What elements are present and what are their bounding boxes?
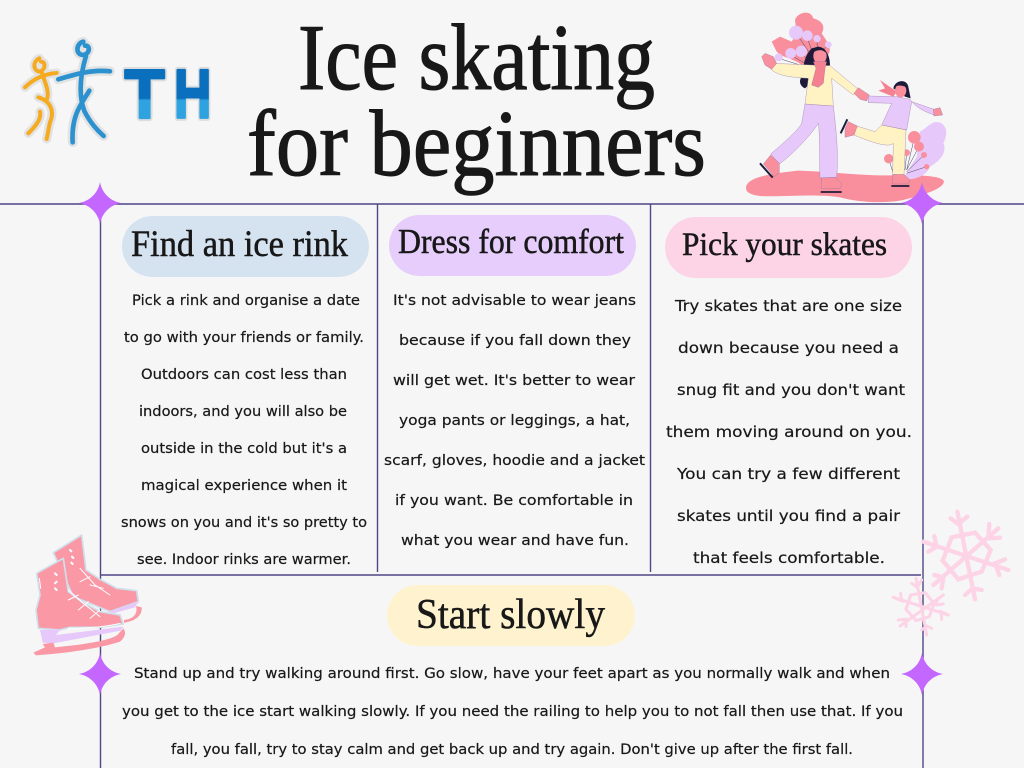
logo: TH dancers xyxy=(25,42,211,142)
body text: skates until you find a pair xyxy=(677,507,901,525)
bush behind mother xyxy=(772,13,830,65)
large snowflake xyxy=(923,512,1008,599)
panel: find an ice rink xyxy=(121,216,369,568)
title: Ice skating xyxy=(298,6,655,110)
title: for beginners xyxy=(247,92,706,196)
body text: down because you need a xyxy=(678,339,899,357)
text: TH: H xyxy=(174,56,211,132)
child figure xyxy=(841,80,943,186)
body text xyxy=(384,293,646,549)
heading pill: Start slowly xyxy=(416,592,605,638)
icon: orange dancer xyxy=(25,58,57,139)
heading pill xyxy=(665,217,912,278)
heading pill: Pick your skates xyxy=(682,227,887,263)
body text: snug fit and you don't want xyxy=(677,381,905,399)
text: TH: T xyxy=(125,56,165,132)
ground xyxy=(746,171,944,202)
icon: snowflakes xyxy=(893,512,1008,635)
heading pill xyxy=(389,215,636,276)
body text: magical experience when it xyxy=(141,478,348,494)
body text: indoors, and you will also be xyxy=(139,404,347,420)
body text: that feels comfortable. xyxy=(693,549,885,567)
panel: dress for comfort xyxy=(384,215,646,549)
text: TH: T xyxy=(125,56,165,132)
body text xyxy=(121,293,367,568)
pom flowers xyxy=(775,26,929,173)
body text: Outdoors can cost less than xyxy=(141,367,347,383)
panel: pick your skates xyxy=(665,217,912,567)
body text: because if you fall down they xyxy=(399,333,631,349)
body text: It's not advisable to wear jeans xyxy=(393,293,636,309)
body text: Try skates that are one size xyxy=(674,297,902,315)
text: TH xyxy=(125,56,211,132)
body text: Stand up and try walking around first. Go slow, have your feet apart as you normally walk and when xyxy=(134,666,890,682)
body text: see. Indoor rinks are warmer. xyxy=(137,552,351,568)
body text xyxy=(122,666,903,758)
body text: you get to the ice start walking slowly. If you need the railing to help you to not fall then use that. If you xyxy=(122,704,903,720)
title xyxy=(247,6,706,196)
body text: if you want. Be comfortable in xyxy=(395,493,633,509)
body text: snows on you and it's so pretty to xyxy=(121,515,367,531)
heading pill xyxy=(122,216,369,277)
body text: outside in the cold but it's a xyxy=(141,441,347,457)
body text: You can try a few different xyxy=(676,465,900,483)
body text: scarf, gloves, hoodie and a jacket xyxy=(384,453,646,469)
sparkles xyxy=(79,182,943,695)
heading pill xyxy=(387,585,635,646)
body text: what you wear and have fun. xyxy=(401,533,629,549)
bush behind child xyxy=(903,122,946,179)
body text xyxy=(666,297,912,567)
body text: yoga pants or leggings, a hat, xyxy=(399,413,630,429)
panel: start slowly xyxy=(122,585,903,758)
illustration: mother and child skating xyxy=(746,13,946,202)
body text: them moving around on you. xyxy=(666,423,912,441)
mother figure xyxy=(760,47,869,192)
text: TH: H xyxy=(174,56,211,132)
body text: to go with your friends or family. xyxy=(124,330,364,346)
body text: will get wet. It's better to wear xyxy=(393,373,635,389)
small snowflake xyxy=(893,578,948,635)
heading pill: Dress for comfort xyxy=(398,222,624,261)
body text: fall, you fall, try to stay calm and get back up and try again. Don't give up after the first fall. xyxy=(171,742,853,758)
icon: ice skates xyxy=(33,535,142,655)
heading pill: Find an ice rink xyxy=(131,224,348,265)
body text: Pick a rink and organise a date xyxy=(132,293,360,309)
icon: blue dancer xyxy=(58,42,110,142)
